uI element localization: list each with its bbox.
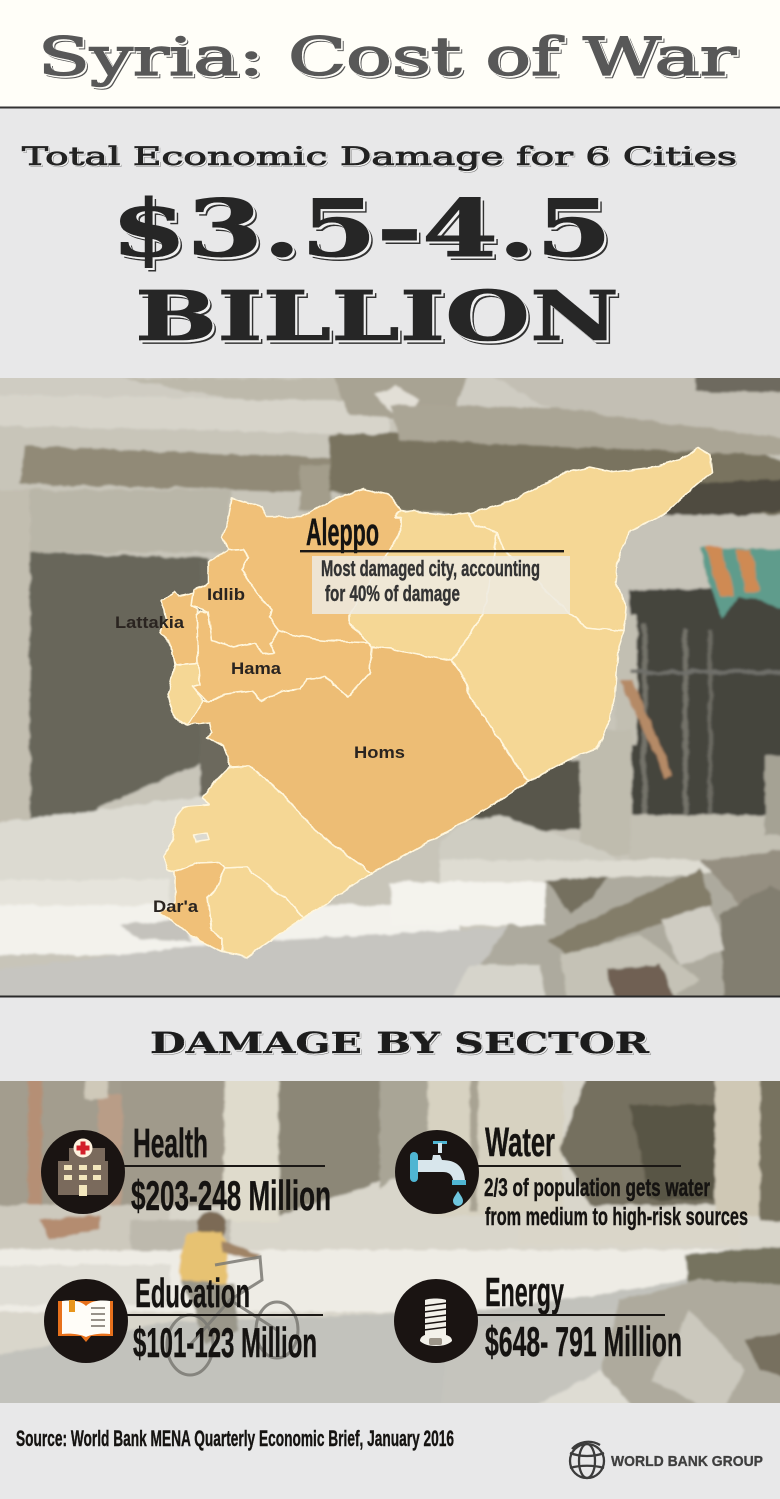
wordmark: WORLD BANK GROUP <box>611 1454 763 1470</box>
region: Idlib <box>192 549 279 654</box>
panel: map over ruined building photo <box>0 360 780 1020</box>
icon: open book <box>44 1279 128 1363</box>
region: Dar'a <box>160 862 225 952</box>
panel: damage by sector over street photo <box>0 1065 780 1415</box>
map labels <box>115 585 405 916</box>
subheading: Total Economic Damage for 6 Cities <box>22 142 737 171</box>
map labels: Lattakia <box>115 613 185 632</box>
photo: ruined building <box>0 360 780 1020</box>
logo: World Bank Group <box>570 1442 763 1478</box>
item: health <box>41 1120 331 1219</box>
map labels: Homs <box>354 743 405 762</box>
icon: light bulb <box>394 1279 478 1363</box>
heading: Energy <box>485 1269 564 1315</box>
callout rule <box>300 550 564 552</box>
region: Rif Dimashq <box>163 766 372 918</box>
source note: Source: World Bank MENA Quarterly Economic Brief, January 2016 <box>16 1426 454 1451</box>
callout box <box>312 556 570 614</box>
region: Tartus <box>168 663 203 725</box>
item: energy <box>394 1269 682 1365</box>
callout text: Most damaged city, accounting <box>321 556 540 581</box>
region: Lattakia <box>160 592 198 665</box>
heading: Water <box>485 1119 555 1165</box>
icon: globe <box>570 1442 604 1478</box>
photo: child on a bicycle in ruined street <box>0 1065 780 1415</box>
map labels: Idlib <box>207 585 245 604</box>
icon: water tap <box>395 1130 479 1214</box>
value: $101-123 Million <box>133 1319 317 1366</box>
map labels: Dar'a <box>153 897 199 916</box>
heading: Health <box>133 1120 208 1166</box>
value: $203-248 Million <box>131 1172 331 1219</box>
item: education <box>44 1270 323 1366</box>
icon: hospital <box>41 1130 125 1214</box>
heading: damage by sector: DAMAGE BY SECTOR <box>150 1026 650 1060</box>
region: Raqqa <box>349 510 497 661</box>
heading: Education <box>135 1270 250 1316</box>
region: Hasakah <box>468 448 712 631</box>
region: Hama <box>192 611 372 703</box>
callout: Aleppo: for 40% of damage <box>325 581 460 606</box>
title banner <box>0 0 780 108</box>
map: Syria governorates <box>160 448 712 957</box>
title banner: Syria: Cost of War <box>38 28 736 88</box>
region: Homs <box>188 647 528 873</box>
map labels: Hama <box>231 659 282 678</box>
damage figure: $3.5-4.5 <box>111 182 612 275</box>
region: Deir ez-Zor <box>452 533 624 782</box>
region: Aleppo <box>222 489 401 643</box>
damage unit: BILLION <box>135 277 619 357</box>
item: water <box>395 1119 748 1231</box>
callout: Aleppo <box>300 512 570 614</box>
callout heading: Aleppo <box>306 512 379 554</box>
headline: total economic damage <box>22 142 737 357</box>
region: Sweida <box>208 867 303 957</box>
